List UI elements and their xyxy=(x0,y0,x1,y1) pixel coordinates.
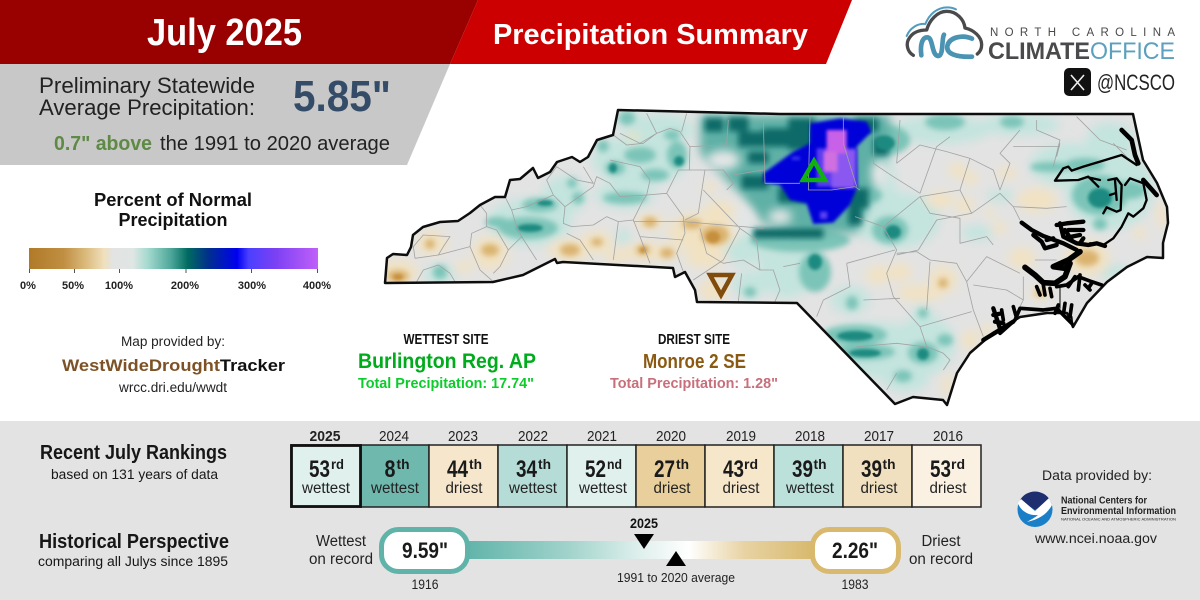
colour bar labels: 400% xyxy=(303,280,331,292)
year labels: 2025 xyxy=(310,428,340,445)
heading: historical perspective xyxy=(38,531,229,569)
rank categories: driest xyxy=(722,480,760,497)
text: WestWideDroughtTracker: WestWideDrought Tracker xyxy=(62,356,285,375)
year labels xyxy=(310,428,963,445)
capsule: driest on record: 2.26" xyxy=(832,538,878,563)
rank categories xyxy=(301,480,967,497)
capsule: driest on record xyxy=(812,530,973,592)
rank categories: driest xyxy=(654,480,691,497)
rank values xyxy=(309,456,951,483)
capsule: wettest on record: on record xyxy=(309,551,373,568)
table: July rankings 2016 to 2025 xyxy=(291,428,981,507)
callout: wettest site xyxy=(358,331,536,392)
icon: NOAA logo xyxy=(1018,492,1052,527)
capsule: wettest on record xyxy=(309,530,468,592)
rank values: 39 xyxy=(861,456,882,483)
rank categories: driest xyxy=(446,480,483,497)
label: preliminary statewide average: Preliminary Statewide xyxy=(39,73,255,98)
legend title: Precipitation xyxy=(118,210,228,230)
rank suffixes: rd xyxy=(331,456,344,472)
text: @NCSCO handle: @NCSCO xyxy=(1097,70,1175,95)
marker: 2025 xyxy=(630,516,658,549)
county boundaries: west xyxy=(413,113,800,302)
capsule: driest on record: on record xyxy=(909,551,973,568)
callout: driest site: DRIEST SITE xyxy=(658,331,730,348)
text: Climate Office: OFFICE xyxy=(1090,38,1175,65)
rank values: 39 xyxy=(792,456,813,483)
credit: data provider: Data provided by: xyxy=(1042,468,1152,483)
text: Climate Office xyxy=(988,38,1175,65)
rank suffixes xyxy=(331,456,965,472)
rank categories: wettest xyxy=(785,480,835,497)
icon: cloud with NC xyxy=(907,7,982,57)
value: 5.85 inches: 5.85" xyxy=(293,72,391,121)
rank suffixes: nd xyxy=(607,456,622,472)
callout: driest site: Monroe 2 SE xyxy=(643,351,746,373)
heading: historical perspective: Historical Perspective xyxy=(39,531,229,553)
heading: recent July rankings xyxy=(40,442,227,482)
rank suffixes: rd xyxy=(744,456,758,472)
colour bar labels: 300% xyxy=(238,280,266,292)
rank values: 8 xyxy=(384,456,396,483)
rank categories: wettest xyxy=(301,480,351,497)
year labels: 2017 xyxy=(864,428,894,445)
marker: 1991 to 2020 average: 1991 to 2020 average xyxy=(617,570,735,585)
text: Climate Office: CLIMATE xyxy=(988,38,1090,65)
estuaries: Pamlico and Neuse rivers xyxy=(1000,222,1105,333)
highlight: 2025 cell xyxy=(292,446,360,506)
rank suffixes: th xyxy=(538,456,551,472)
logo: North Carolina Climate Office xyxy=(907,7,1175,96)
estuary: Cape Fear River xyxy=(983,308,1013,340)
year labels: 2022 xyxy=(518,428,548,445)
icon: wettest site triangle xyxy=(803,161,825,180)
heading: recent July rankings: Recent July Rankings xyxy=(40,442,227,464)
rank suffixes: th xyxy=(469,456,482,472)
text: NCEI name: NATIONAL OCEANIC AND ATMOSPHERIC ADMINISTRATION xyxy=(1061,518,1177,522)
text: NCEI name: Environmental Information xyxy=(1061,505,1176,517)
capsule: driest on record: Driest xyxy=(922,533,961,550)
capsule: driest on record: 1983 xyxy=(842,577,868,592)
year labels: 2024 xyxy=(379,428,409,445)
heading: recent July rankings: based on 131 years of data xyxy=(51,467,218,482)
rank values: 53 xyxy=(309,456,330,483)
chart: historical range bar xyxy=(309,516,973,592)
colour bar labels: 100% xyxy=(105,280,133,292)
map: North Carolina percent of normal precipitation xyxy=(378,110,1168,405)
icon: X badge xyxy=(1064,68,1091,96)
rank suffixes: th xyxy=(676,456,689,472)
text: departure from average xyxy=(54,133,390,155)
callout: wettest site: Total Precipitation: 17.74" xyxy=(358,375,534,392)
rank values: 34 xyxy=(516,456,538,483)
rank suffixes: th xyxy=(882,456,896,472)
rank categories: wettest xyxy=(370,480,420,497)
year labels: 2023 xyxy=(448,428,478,445)
header: bright red summary banner xyxy=(450,0,852,64)
panel: statewide average xyxy=(0,64,450,165)
marker: 1991 to 2020 average xyxy=(617,551,735,585)
text: departure from average: the 1991 to 2020 average xyxy=(160,133,390,155)
marker: 2025: 2025 xyxy=(630,516,658,531)
text: NCEI name: National Centers for xyxy=(1061,494,1147,506)
rank values: 27 xyxy=(654,456,675,483)
colour bar labels: 50% xyxy=(62,280,84,292)
callout: driest site: Total Precipitation: 1.28" xyxy=(610,375,778,392)
panel: bottom band xyxy=(0,421,1200,600)
text: departure from average: 0.7" above xyxy=(54,133,152,155)
sounds: Albemarle and Pamlico shorelines xyxy=(1055,130,1157,245)
county boundaries: east xyxy=(808,117,1127,390)
legend: percent of normal precipitation xyxy=(20,190,331,292)
rank categories: wettest xyxy=(508,480,558,497)
capsule: wettest on record: 9.59" xyxy=(402,538,448,563)
rank categories: driest xyxy=(930,480,967,497)
label: preliminary statewide average xyxy=(39,73,255,120)
rank values: 52 xyxy=(585,456,606,483)
rank values: 53 xyxy=(930,456,951,483)
rank suffixes: th xyxy=(396,456,410,472)
capsule: wettest on record: 1916 xyxy=(412,577,438,592)
rank values: 44 xyxy=(447,456,469,483)
colour bar labels: 200% xyxy=(171,280,199,292)
colour bar labels xyxy=(20,280,331,292)
credit: data provider xyxy=(1018,468,1177,546)
year labels: 2016 xyxy=(933,428,963,445)
icon: driest site triangle xyxy=(710,275,732,295)
colour bar labels: 0% xyxy=(20,280,36,292)
rank categories: wettest xyxy=(578,480,628,497)
rank values: 43 xyxy=(723,456,744,483)
title: July 2025: July 2025 xyxy=(147,12,302,54)
callout: driest site xyxy=(610,331,778,392)
rank categories: driest xyxy=(860,480,898,497)
legend title xyxy=(94,190,252,230)
legend title: Percent of Normal xyxy=(94,190,252,210)
rank suffixes: th xyxy=(814,456,826,472)
credit: map provider xyxy=(62,334,285,395)
text: NCEI name xyxy=(1061,494,1177,522)
callout: wettest site: WETTEST SITE xyxy=(404,331,488,348)
state outline xyxy=(385,110,1168,405)
ranking cells xyxy=(291,445,981,507)
header: dark red month banner xyxy=(0,0,478,64)
label: preliminary statewide average: Average Precipitation: xyxy=(39,95,255,120)
year labels: 2020 xyxy=(656,428,686,445)
callout: wettest site: Burlington Reg. AP xyxy=(358,350,536,373)
heading: Precipitation Summary: Precipitation Summary xyxy=(493,19,808,51)
year labels: 2019 xyxy=(726,428,756,445)
rainfall core: north central xyxy=(700,115,890,238)
capsule: wettest on record: Wettest xyxy=(316,533,367,550)
credit: map provider: wrcc.dri.edu/wwdt xyxy=(118,380,227,395)
year labels: 2018 xyxy=(795,428,825,445)
text: North Carolina: NORTH CAROLINA xyxy=(990,27,1175,39)
credit: data provider: www.ncei.noaa.gov xyxy=(1034,531,1157,546)
heading: historical perspective: comparing all Julys since 1895 xyxy=(38,554,228,569)
colour bar xyxy=(29,248,318,269)
credit: map provider: Map provided by: xyxy=(121,334,225,349)
year labels: 2021 xyxy=(587,428,617,445)
rank suffixes: rd xyxy=(951,456,965,472)
